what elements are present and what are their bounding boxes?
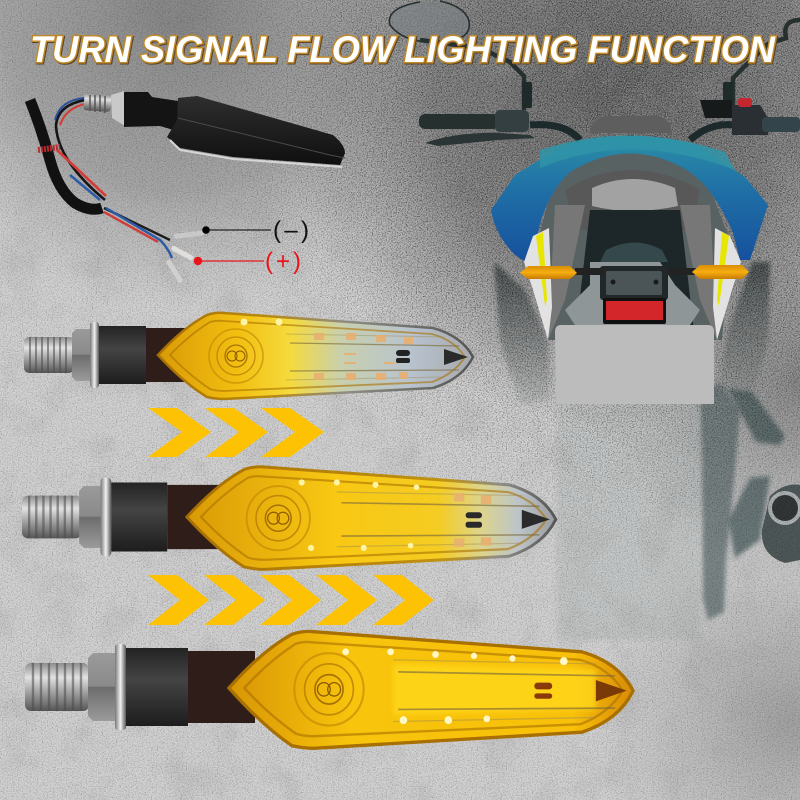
flow arrows row 1	[148, 408, 324, 457]
positive wire label	[194, 248, 301, 275]
lens	[187, 467, 556, 569]
motorcycle rear view	[389, 1, 800, 404]
signal 3: fully lit	[25, 631, 633, 748]
negative wire label: (–)	[273, 217, 309, 244]
negative wire label	[202, 217, 309, 244]
blue cowl	[491, 135, 768, 263]
tail section	[538, 152, 730, 340]
lens	[229, 631, 633, 748]
threaded stud	[83, 91, 125, 126]
wiring harness	[30, 98, 172, 258]
wire terminals	[165, 230, 204, 284]
mount	[24, 322, 198, 388]
LED strips	[314, 333, 413, 380]
lens	[158, 313, 473, 399]
left fender	[494, 262, 550, 405]
right fender	[718, 262, 770, 405]
signal 1: partially lit	[24, 313, 473, 399]
licence holder	[600, 266, 668, 300]
flow arrows row 2	[148, 575, 434, 625]
rear wheel ghost	[556, 404, 700, 640]
title: TURN SIGNAL FLOW LIGHTING FUNCTION	[30, 29, 776, 70]
mirrors	[389, 1, 800, 110]
red reflector face	[606, 301, 663, 320]
number plate	[555, 325, 714, 404]
fork and suspension	[700, 384, 785, 620]
handlebars	[419, 82, 800, 146]
black body	[124, 92, 345, 167]
red reflector	[603, 298, 666, 324]
left small turn signal	[520, 266, 603, 279]
ghosted lower motorcycle	[494, 262, 800, 640]
mount	[22, 478, 229, 556]
right small turn signal	[668, 265, 749, 279]
exhaust	[728, 476, 800, 563]
white and yellow side stripes	[524, 228, 741, 340]
signal 2: mostly lit	[22, 467, 556, 569]
positive wire label: (+)	[265, 248, 301, 275]
mount	[25, 644, 255, 730]
top product: black turn signal with wiring	[30, 91, 345, 284]
